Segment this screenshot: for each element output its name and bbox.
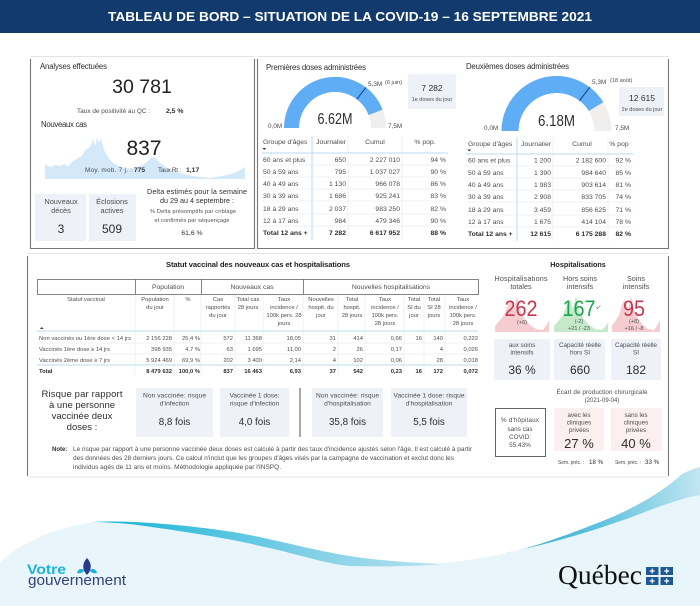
card: avec les cliniques privées: 27 % <box>564 436 594 451</box>
note: individus agés de 11 ans et moins. Méthodologie appliquée par l'INSPQ. <box>73 464 281 471</box>
table: statut vaccinal: 18,05 <box>286 336 301 342</box>
card: capacité réelle SI: SI <box>633 350 639 356</box>
heading: écart de production chirurgicale <box>556 387 648 404</box>
kpi: soins intensifs: 95 <box>623 296 645 321</box>
table: statut vaccinal: 0,23 <box>391 369 403 375</box>
table: premières doses: 479 346 <box>375 218 400 225</box>
gauge: premières doses: 7,5M <box>388 123 402 130</box>
heading: risque par rapport <box>42 389 123 433</box>
table: statut vaccinal: 100k pers. <box>449 313 477 319</box>
card: risque hospitalisation non vaccinée: d'hospitalisation <box>324 400 371 408</box>
gauge: deuxièmes doses: 6.18M <box>538 113 575 130</box>
card: capacité réelle hors SI: 660 <box>570 363 590 377</box>
divider <box>299 388 301 437</box>
note: Le risque par rapport à une personne vaccinée deux doses est calculé à partir des taux d'incidence ajustés selon l'âge. Il est calculé à partir <box>73 446 472 453</box>
kpi: hospitalisations totales: totales <box>510 282 532 291</box>
card: aux soins intensifs: 36 % <box>508 363 536 377</box>
table: deuxièmes doses: 2 908 <box>534 194 551 201</box>
table: deuxièmes doses: 903 614 <box>581 182 606 189</box>
moving average and Rt: Taux Rt : <box>158 167 181 174</box>
table: statut vaccinal: Total cas <box>237 297 260 303</box>
table: deuxièmes doses: 82 % <box>616 231 631 238</box>
heading: écart de production chirurgicale: Écart de production chirurgicale <box>556 387 648 396</box>
table: premières doses: 40 à 49 ans <box>263 181 299 188</box>
gauge: premières doses <box>268 77 402 130</box>
logo: québec: Québec <box>558 560 642 590</box>
table: statut vaccinal: 28 <box>437 358 443 364</box>
kpi: soins intensifs <box>612 274 660 332</box>
gauge: deuxièmes doses <box>484 76 633 132</box>
card: risque infection 1 dose: Vaccinée 1 dose: <box>229 392 280 400</box>
table: statut vaccinal: Taux <box>457 297 469 303</box>
moving average and Rt: Moy. mob. 7 j. : <box>85 167 132 174</box>
card: éclosions actives <box>89 194 136 241</box>
previous week: avec <box>558 459 604 466</box>
footer wave <box>0 467 700 606</box>
gauge: premières doses: 0,0M <box>268 123 282 130</box>
table: statut vaccinal: 100k pers. 28 <box>266 313 302 319</box>
table: premières doses: 1 130 <box>329 181 346 188</box>
table: statut vaccinal: 0,222 <box>463 336 478 342</box>
heading: statut vaccinal: Statut vaccinal des nouveaux cas et hospitalisations <box>166 260 350 269</box>
table: statut vaccinal: 0,17 <box>391 347 402 353</box>
table: premières doses: 2 037 <box>329 206 346 213</box>
table: statut vaccinal: rapportés <box>206 305 230 311</box>
card: sans les cliniques privées: sans les <box>624 412 648 419</box>
table: premières doses: 1 037 027 <box>370 169 400 176</box>
heading: risque par rapport: vaccinée deux <box>52 411 113 422</box>
heading: premières doses: Premières doses administrées <box>266 63 366 72</box>
table: premières doses: 966 078 <box>375 181 400 188</box>
kpi: soins intensifs: +16 / -8 <box>625 326 643 332</box>
card: éclosions actives: 509 <box>102 222 122 236</box>
table: statut vaccinal: jours <box>427 313 440 319</box>
table: statut vaccinal <box>37 279 478 375</box>
table: statut vaccinal: Non vaccinés ou 1ère dose < 14 jrs <box>39 336 131 342</box>
card: nouveaux décès: 3 <box>58 222 65 236</box>
panel: statut vaccinal et hospitalisations <box>28 254 668 477</box>
table: statut vaccinal: 414 <box>353 336 364 342</box>
table: statut vaccinal: Nouvelles hospitalisations <box>352 284 431 291</box>
icon: drapeau <box>646 567 673 585</box>
delta estimate: et confirmés par séquençage <box>154 218 230 224</box>
table: deuxièmes doses: 414 104 <box>581 219 606 226</box>
logo: votre gouvernement: Votre <box>27 561 66 577</box>
table: statut vaccinal: incidence / <box>449 305 477 311</box>
card: sans les cliniques privées: cliniques <box>624 420 648 426</box>
card: risque hospitalisation 1 dose <box>391 388 467 437</box>
table: deuxièmes doses: 71 % <box>616 207 631 214</box>
note <box>52 446 472 471</box>
icon: fleur <box>77 558 97 575</box>
table: statut vaccinal: 6,93 <box>290 369 302 375</box>
moving average and Rt: 1,17 <box>186 167 199 174</box>
table: deuxièmes doses: Journalier <box>521 141 552 148</box>
delta estimate: du 29 au 4 septembre : <box>160 196 234 205</box>
card: risque hospitalisation 1 dose: d'hospitalisation <box>406 400 453 408</box>
table: statut vaccinal: 28 jours <box>453 321 473 327</box>
table: statut vaccinal: 11,00 <box>287 347 301 353</box>
table: statut vaccinal: Vaccinés 1ère dose ≥ 14 jrs <box>39 347 110 353</box>
table: premières doses: 984 <box>335 218 346 225</box>
table: statut vaccinal: 0,66 <box>391 336 402 342</box>
table: deuxièmes doses: 12 à 17 ans <box>468 219 504 226</box>
moving average and Rt: 775 <box>134 167 145 174</box>
card: risque hospitalisation 1 dose: 5,5 fois <box>413 417 445 428</box>
table: statut vaccinal: Total <box>39 369 53 375</box>
card: avec les cliniques privées: avec les <box>567 412 591 419</box>
kpi: soins intensifs: intensifs <box>623 282 650 291</box>
table: statut vaccinal: 0,018 <box>463 358 478 364</box>
table: premières doses: 983 250 <box>375 206 400 213</box>
table: deuxièmes doses: 92 % <box>616 158 631 164</box>
heading: risque par rapport: doses : <box>67 422 97 433</box>
table: statut vaccinal: Total <box>408 297 420 303</box>
callout: hôpitaux sans cas: sans cas <box>507 426 533 433</box>
kpi: hors soins intensifs: +21 / -23 <box>568 326 590 332</box>
previous week: sans <box>615 459 660 466</box>
table: statut vaccinal: hospit. du <box>308 305 334 311</box>
table: premières doses: Total 12 ans + <box>263 230 308 237</box>
card: aux soins intensifs <box>494 339 550 380</box>
callout: hôpitaux sans cas <box>496 408 546 456</box>
table: premières doses: 1 686 <box>329 193 346 200</box>
gauge: deuxièmes doses: 0,0M <box>484 125 498 132</box>
table: statut vaccinal: 31 <box>330 336 336 342</box>
card: capacité réelle hors SI: hors SI <box>570 350 590 356</box>
heading: écart de production chirurgicale: (2021-09-04) <box>585 398 619 404</box>
table: premières doses: 90 % <box>430 218 446 225</box>
delta estimate <box>147 187 247 237</box>
table: statut vaccinal: Total <box>428 297 440 303</box>
table: deuxièmes doses: 81 % <box>616 182 631 189</box>
card: capacité réelle SI: 182 <box>626 363 646 377</box>
table: statut vaccinal: 25,4 % <box>182 336 200 342</box>
table: deuxièmes doses: 6 175 288 <box>576 231 606 238</box>
card: nouveaux décès <box>35 194 86 241</box>
number: analyses: 30 781 <box>112 76 172 98</box>
card: éclosions actives: Éclosions <box>96 197 128 206</box>
kpi: hospitalisations totales: 262 <box>504 296 538 321</box>
table: statut vaccinal: 69,9 % <box>182 358 200 364</box>
header banner <box>0 0 700 33</box>
table: statut vaccinal: jour <box>315 313 326 319</box>
gauge: deuxièmes doses: 5,3M <box>592 79 606 86</box>
table: statut vaccinal: 8 479 632 <box>146 369 172 375</box>
table: premières doses: 50 à 59 ans <box>263 169 299 176</box>
number: nouveaux cas: 837 <box>126 137 162 160</box>
panel: doses <box>258 56 668 248</box>
card: avec les cliniques privées: cliniques <box>567 420 591 426</box>
card: avec les cliniques privées: privées <box>569 427 589 434</box>
table: deuxièmes doses: 856 625 <box>581 207 606 214</box>
table: statut vaccinal: 28 jours <box>375 321 395 327</box>
gauge: deuxièmes doses: (18 août) <box>610 78 633 84</box>
table: statut vaccinal: Nouvelles <box>308 297 334 303</box>
card: risque hospitalisation non vaccinée <box>312 388 383 437</box>
table: premières doses: 925 241 <box>375 193 400 200</box>
table: statut vaccinal: 28 jours <box>342 313 362 319</box>
table: statut vaccinal: 4 <box>333 358 337 364</box>
table: statut vaccinal: 63 <box>227 347 233 353</box>
note: Note: <box>52 447 67 453</box>
card: risque infection non vaccinée: Non vaccinée: risque <box>143 392 206 400</box>
card: avec les cliniques privées <box>554 408 604 451</box>
table: premières doses: 94 % <box>430 157 446 164</box>
table: statut vaccinal: 16 463 <box>244 369 263 375</box>
table: premières doses: Cumul <box>365 139 385 146</box>
heading: nouveaux cas: Nouveaux cas <box>41 120 87 129</box>
table: statut vaccinal: 0,026 <box>463 347 478 353</box>
table: deuxièmes doses: 1 200 <box>534 158 551 164</box>
table: statut vaccinal: Population <box>152 284 184 291</box>
table: premières doses: 90 % <box>430 169 446 176</box>
previous week: avec: Sem. préc. : <box>558 460 584 466</box>
card: risque hospitalisation non vaccinée: Non vaccinée: risque <box>316 392 379 400</box>
card: risque infection 1 dose <box>220 388 289 437</box>
kpi: hors soins intensifs: (-2) <box>575 319 583 325</box>
table: premières doses: Groupe d'âges <box>263 139 308 146</box>
heading: risque par rapport: à une personne <box>49 400 115 411</box>
table: premières doses: 7 282 <box>329 230 346 237</box>
table: premières doses: Journalier <box>316 139 347 146</box>
card: aux soins intensifs: intensifs <box>510 350 534 356</box>
gauge: deuxièmes doses: 7,5M <box>615 125 629 132</box>
table: statut vaccinal: 837 <box>223 369 233 375</box>
callout: hôpitaux sans cas: 55.43% <box>509 442 531 449</box>
heading: risque par rapport: Risque par rapport <box>42 389 123 400</box>
table: statut vaccinal: 1 695 <box>247 347 262 353</box>
table: statut vaccinal: SI 28 <box>427 305 441 311</box>
positivity rate: 2,5 % <box>166 108 183 115</box>
table: premières doses: 82 % <box>430 206 446 213</box>
table: deuxièmes doses: 85 % <box>616 170 631 177</box>
table: premières doses: 88 % <box>430 230 446 237</box>
card: risque infection 1 dose: risque d'infection <box>230 400 279 408</box>
table: statut vaccinal: 11 368 <box>245 336 262 342</box>
table: statut vaccinal: 2 <box>333 347 336 353</box>
table: statut vaccinal: jours <box>277 321 290 327</box>
table: premières doses: 2 227 010 <box>370 157 400 164</box>
card: risque infection non vaccinée <box>136 388 213 437</box>
card: 2e doses du jour <box>619 87 664 116</box>
table: deuxièmes doses: % pop <box>609 141 629 148</box>
heading: deuxièmes doses: Deuxièmes doses administrées <box>466 62 569 71</box>
kpi: hospitalisations totales: (+6) <box>517 320 527 326</box>
heading: analyses effectuées: Analyses effectuées <box>40 62 107 71</box>
delta estimate: Delta estimés pour la semaine <box>147 187 247 196</box>
kpi: hospitalisations totales: Hospitalisations <box>494 274 548 283</box>
table: statut vaccinal: 5 924 469 <box>146 358 172 364</box>
table: statut vaccinal: 37 <box>330 369 336 375</box>
logo: votre gouvernement: gouvernement <box>28 573 126 589</box>
table: statut vaccinal: 2 156 228 <box>146 336 172 342</box>
table: statut vaccinal: Cas <box>213 297 223 303</box>
kpi: soins intensifs: (+8) <box>629 319 639 325</box>
table: statut vaccinal: 0,072 <box>463 369 478 375</box>
table: premières doses: % pop. <box>414 139 436 146</box>
positivity rate <box>77 108 183 115</box>
card: capacité réelle SI: Capacité réelle <box>615 342 657 349</box>
card: 2e doses du jour: 12 615 <box>629 93 655 103</box>
table: premières doses: 30 à 39 ans <box>263 193 299 200</box>
panel: analyses et nouveaux cas <box>30 56 254 248</box>
table: deuxièmes doses: Groupe d'âges <box>468 141 513 148</box>
table: statut vaccinal: % <box>185 297 191 303</box>
table: statut vaccinal: 28 jours <box>238 305 258 311</box>
kpi: soins intensifs: Soins <box>627 274 645 283</box>
table: statut vaccinal: 140 <box>433 336 443 342</box>
table: statut vaccinal: 4,7 % <box>185 347 200 353</box>
card: sans les cliniques privées: privées <box>626 427 646 434</box>
table: statut vaccinal: 572 <box>223 336 233 342</box>
table: premières doses: 795 <box>335 169 346 176</box>
table: statut vaccinal: incidence / <box>371 305 399 311</box>
note: des données des 28 derniers jours. Ce calcul n'inclut que les groupes d'âges visés par la campagne de vaccination et exclut donc les <box>73 455 454 462</box>
card: risque infection non vaccinée: d'infection <box>160 400 190 408</box>
card: aux soins intensifs: aux soins <box>509 342 535 349</box>
table: premières doses: 83 % <box>430 193 446 200</box>
table: deuxièmes doses: 833 705 <box>581 194 606 201</box>
table: premières doses: 12 à 17 ans <box>263 218 299 225</box>
kpi: hors soins intensifs: 167 <box>562 296 596 321</box>
previous week: sans: Sem. préc. : <box>615 460 641 466</box>
table: statut vaccinal: du jour <box>209 313 227 319</box>
table: statut vaccinal: 0,06 <box>391 358 402 364</box>
card: sans les cliniques privées: 40 % <box>621 436 651 451</box>
table: statut vaccinal: Total <box>346 297 358 303</box>
table: statut vaccinal: 172 <box>433 369 443 375</box>
kpi: hors soins intensifs: intensifs <box>567 282 594 291</box>
table: statut vaccinal: 102 <box>353 358 363 364</box>
previous week: sans: 33 % <box>645 459 660 466</box>
callout: hôpitaux sans cas: COVID: <box>509 434 531 441</box>
table: statut vaccinal: jour <box>408 313 419 319</box>
table: premières doses: 6 617 952 <box>370 230 400 237</box>
kpi: hors soins intensifs <box>554 274 608 332</box>
table: deuxièmes doses: 60 ans et plus <box>468 158 511 164</box>
table: deuxièmes doses: 40 à 49 ans <box>468 182 504 189</box>
table: premières doses: 60 ans et plus <box>263 157 306 164</box>
table: statut vaccinal: 542 <box>353 369 363 375</box>
table: premières doses: 18 à 29 ans <box>263 206 299 213</box>
card: capacité réelle hors SI: Capacité réelle <box>559 342 601 349</box>
logo: votre gouvernement <box>27 558 126 589</box>
table: statut vaccinal: 4 <box>440 347 444 353</box>
delta estimate: 61,6 % <box>181 230 203 237</box>
table: statut vaccinal: 16 <box>416 336 422 342</box>
table: statut vaccinal: Vaccinés 2ème dose ≥ 7 jrs <box>39 358 110 364</box>
table: statut vaccinal: Statut vaccinal <box>67 297 105 303</box>
moving average and Rt <box>85 167 199 174</box>
heading: hospitalisations: Hospitalisations <box>550 260 606 269</box>
table: statut vaccinal: 202 <box>223 358 233 364</box>
card: risque hospitalisation 1 dose: Vaccinée 1 dose: risque <box>394 392 465 400</box>
title: TABLEAU DE BORD – SITUATION DE LA COVID-19 – 16 SEPTEMBRE 2021 <box>108 9 592 24</box>
table: statut vaccinal: incidence / <box>270 305 298 311</box>
kpi: hors soins intensifs: Hors soins <box>563 274 597 283</box>
card: 1e doses du jour <box>408 74 456 109</box>
gauge: premières doses: 5,3M <box>368 81 382 88</box>
table: deuxièmes doses: 3 459 <box>534 207 551 214</box>
kpi: hospitalisations totales <box>494 274 549 332</box>
table: statut vaccinal: Taux <box>379 297 391 303</box>
table: statut vaccinal: 100k pers. <box>371 313 399 319</box>
table: statut vaccinal: 3 400 <box>247 358 262 364</box>
table: statut vaccinal: 16 <box>416 369 423 375</box>
table: deuxièmes doses: 50 à 59 ans <box>468 170 504 177</box>
card: risque hospitalisation non vaccinée: 35,8 fois <box>329 417 366 428</box>
table: statut vaccinal: 2,14 <box>290 358 302 364</box>
table: deuxièmes doses: 984 640 <box>581 170 606 177</box>
table: statut vaccinal: 398 935 <box>151 347 172 353</box>
card: éclosions actives: actives <box>100 206 124 215</box>
card: capacité réelle SI <box>611 339 661 380</box>
table: deuxièmes doses: 1 675 <box>534 219 551 226</box>
previous week: avec: 18 % <box>589 459 604 466</box>
gauge: premières doses: 6.62M <box>318 111 352 128</box>
table: deuxièmes doses: 78 % <box>616 219 631 226</box>
table: premières doses: 86 % <box>430 181 446 188</box>
table: deuxièmes doses: Total 12 ans + <box>468 231 513 238</box>
card: sans les cliniques privées <box>611 408 662 451</box>
table: statut vaccinal: du jour <box>146 305 164 311</box>
table: deuxièmes doses: 1 983 <box>534 182 551 189</box>
table: deuxièmes doses: 12 615 <box>530 231 551 238</box>
card: capacité réelle hors SI <box>554 339 605 380</box>
gauge: premières doses: (6 juin) <box>385 80 402 86</box>
table: deuxièmes doses: 2 182 600 <box>576 158 606 164</box>
table: deuxièmes doses: 74 % <box>616 194 631 201</box>
positivity rate: Taux de positivité au QC : <box>77 108 150 115</box>
card: 1e doses du jour: 1e doses du jour <box>412 97 452 103</box>
table: statut vaccinal: Nouveaux cas <box>230 284 274 291</box>
table: premières doses: 650 <box>335 157 346 164</box>
delta estimate: % Delta présomptifs par criblage <box>150 209 236 215</box>
card: risque infection 1 dose: 4,0 fois <box>239 417 270 428</box>
table: deuxièmes doses: 30 à 39 ans <box>468 194 504 201</box>
table: deuxièmes doses: 1 390 <box>534 170 551 177</box>
table: deuxièmes doses: 18 à 29 ans <box>468 207 504 214</box>
table: statut vaccinal: 26 <box>357 347 363 353</box>
card: 2e doses du jour: 2e doses du jour <box>622 107 662 113</box>
table: statut vaccinal: Population <box>141 297 169 303</box>
table: statut vaccinal: Taux <box>278 297 290 303</box>
table: deuxièmes doses: Cumul <box>572 141 592 148</box>
table: statut vaccinal: hospit. <box>343 305 361 311</box>
card: nouveaux décès: Nouveaux <box>44 197 78 206</box>
card: nouveaux décès: décès <box>51 206 71 215</box>
card: risque infection non vaccinée: 8,8 fois <box>159 417 190 428</box>
table: deuxièmes doses <box>466 137 633 241</box>
callout: hôpitaux sans cas: % d'hôpitaux <box>501 417 540 424</box>
table: statut vaccinal: SI du <box>407 305 421 311</box>
table: statut vaccinal: 100,0 % <box>179 369 200 375</box>
card: 1e doses du jour: 7 282 <box>421 83 443 93</box>
area chart: nouveaux cas <box>45 137 245 179</box>
table: premières doses <box>262 136 448 240</box>
